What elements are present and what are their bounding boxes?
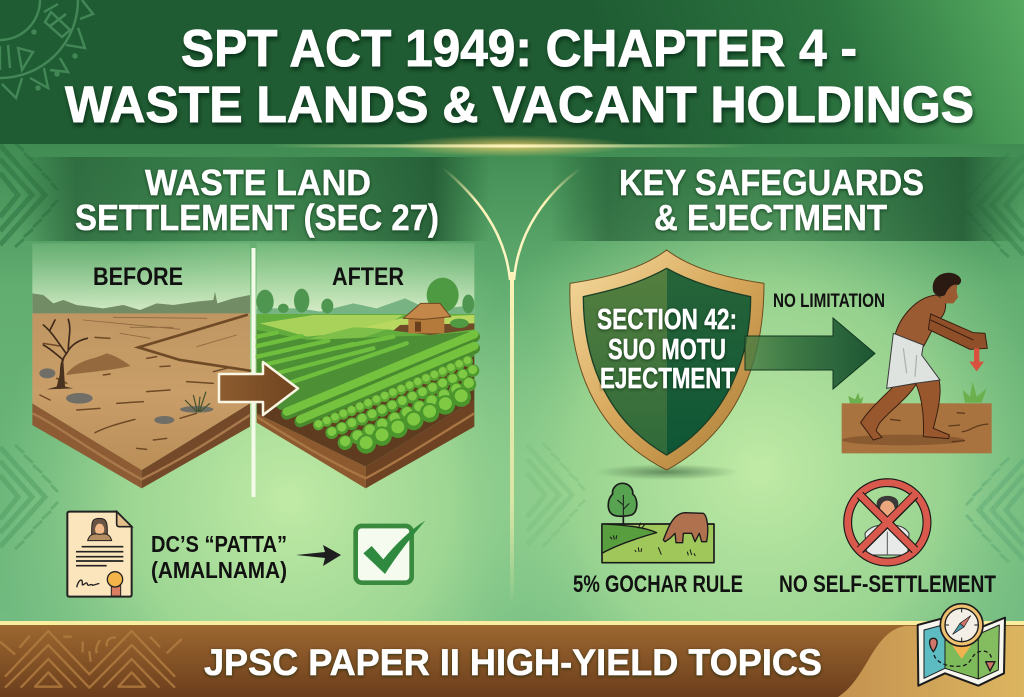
soil side left <box>257 413 366 488</box>
panel heading: key safeguards: & EJECTMENT <box>654 197 887 238</box>
tree line <box>32 292 250 314</box>
no limitation label: NO LIMITATION <box>773 291 885 312</box>
shield text: SECTION 42: <box>597 304 737 336</box>
gold divider line <box>270 135 750 157</box>
header banner <box>0 0 1024 144</box>
icon: check box <box>356 521 425 583</box>
after label: AFTER <box>332 263 404 291</box>
dhoti <box>887 333 940 388</box>
shield text: SUO MOTU <box>608 334 726 366</box>
sky <box>32 243 250 315</box>
background <box>0 143 1024 625</box>
panel heading: key safeguards <box>550 157 1020 241</box>
arrow: shield to encroacher <box>745 318 875 389</box>
panel heading: waste land: SETTLEMENT (SEC 27) <box>75 197 439 238</box>
arrow: patta to approved <box>296 545 341 566</box>
title <box>65 20 974 133</box>
central gold curves <box>443 168 581 605</box>
patta label: DC’S “PATTA” <box>151 531 287 557</box>
vegetable rows <box>287 334 474 444</box>
legs <box>861 380 949 440</box>
icon: shield <box>570 250 764 470</box>
dirt mound <box>67 353 131 375</box>
gochar label: 5% GOCHAR RULE <box>573 571 743 598</box>
panel heading: key safeguards: KEY SAFEGUARDS <box>619 162 924 203</box>
patta label <box>151 531 287 583</box>
soil side right <box>366 400 474 488</box>
thin far rows <box>257 333 407 383</box>
far paddy fields <box>257 314 474 347</box>
panel heading: waste land <box>20 157 490 241</box>
shield text <box>597 304 737 395</box>
head <box>940 283 958 303</box>
rocks <box>39 368 213 424</box>
patta label: (AMALNAMA) <box>151 557 287 583</box>
side tribal patterns <box>0 143 1024 562</box>
red arrow <box>969 348 984 371</box>
icon: gochar pasture <box>602 483 714 563</box>
soil strata <box>32 413 250 479</box>
arrow: before to after <box>219 362 298 415</box>
grass tuft <box>185 392 210 412</box>
planted field surface <box>257 314 474 467</box>
shield ground shadow <box>595 464 739 480</box>
panel: before scene <box>32 243 250 488</box>
divider line <box>252 248 256 497</box>
grass <box>963 382 987 403</box>
panel heading: waste land: WASTE LAND <box>145 162 371 203</box>
footer zigzag pattern <box>0 631 182 688</box>
farmhouse <box>393 303 474 335</box>
panel: after scene <box>256 243 474 488</box>
soil patch <box>842 403 992 453</box>
soil side left <box>32 403 142 488</box>
icon: mandala ornament <box>0 0 93 98</box>
before label: BEFORE <box>93 263 183 291</box>
title: SPT ACT 1949: CHAPTER 4 - <box>181 20 857 78</box>
icon: patta document <box>67 512 132 597</box>
shield text: EJECTMENT <box>600 363 735 395</box>
ground cracks <box>40 315 250 449</box>
dead tree <box>43 319 87 388</box>
footer banner <box>0 621 1024 697</box>
footer text: JPSC PAPER II HIGH-YIELD TOPICS <box>204 642 822 683</box>
icon: ejected man <box>842 273 992 453</box>
torso <box>895 295 946 347</box>
sky <box>257 243 474 315</box>
icon: no self settlement <box>848 483 927 562</box>
upper grass between rows <box>257 330 474 410</box>
distant hills and trees <box>257 298 474 314</box>
title: WASTE LANDS & VACANT HOLDINGS <box>65 76 974 133</box>
icon: map and compass <box>918 604 1005 686</box>
arms <box>928 314 987 349</box>
soil side right <box>142 403 250 488</box>
dry ground <box>32 313 250 470</box>
